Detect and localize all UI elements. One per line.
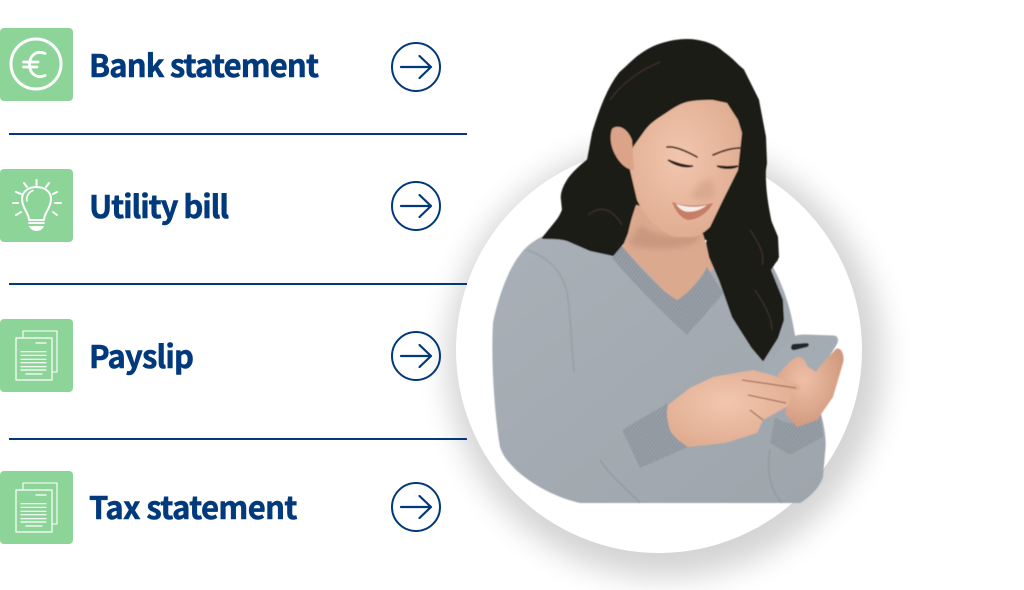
divider xyxy=(9,133,467,135)
mouth xyxy=(672,202,713,220)
row: tax statement xyxy=(0,471,440,544)
hair highlights xyxy=(588,62,772,330)
right hair xyxy=(687,40,783,360)
arrow xyxy=(392,483,440,531)
hands xyxy=(667,349,844,447)
icon: euro coin xyxy=(0,28,73,101)
icon: documents xyxy=(0,319,73,392)
left hair xyxy=(543,40,690,255)
eyes and brows xyxy=(667,147,740,168)
neck shadow xyxy=(628,225,700,249)
icon: light bulb xyxy=(0,169,73,242)
sweater shading xyxy=(527,250,574,372)
arrow xyxy=(392,332,440,380)
row: payslip xyxy=(0,319,440,392)
row: bank statement xyxy=(0,28,440,101)
heading: bank statement: Bank statement xyxy=(89,41,319,86)
row: utility bill xyxy=(0,169,440,242)
divider xyxy=(9,438,467,440)
phone xyxy=(754,334,838,383)
heading: utility bill: Utility bill xyxy=(89,182,229,227)
icon: documents xyxy=(0,471,73,544)
nose shade xyxy=(690,178,716,200)
arrow xyxy=(392,182,440,230)
face xyxy=(630,100,742,237)
v-neck collar xyxy=(612,246,723,335)
neck and chest xyxy=(622,205,714,304)
arrow xyxy=(392,43,440,91)
cuff right xyxy=(770,413,823,455)
photo: woman using phone xyxy=(492,40,844,503)
ear xyxy=(611,127,634,170)
heading: tax statement: Tax statement xyxy=(89,483,297,528)
circle backdrop with shadow xyxy=(447,142,883,578)
divider xyxy=(9,283,467,285)
heading: payslip: Payslip xyxy=(89,332,193,377)
sleeve fold xyxy=(600,450,782,503)
cuff left xyxy=(622,403,688,468)
sweater body xyxy=(492,232,826,503)
back hair xyxy=(588,40,778,300)
